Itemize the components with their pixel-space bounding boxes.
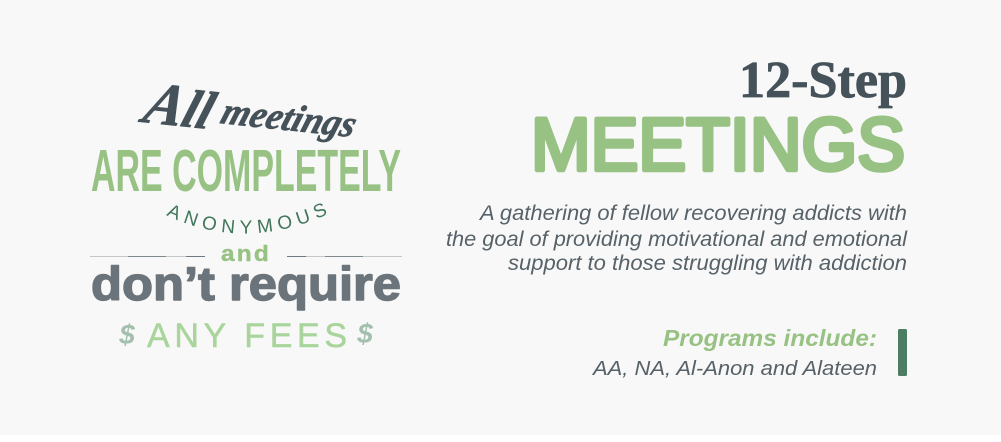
divider left <box>90 256 205 257</box>
title block <box>531 52 907 186</box>
text: ANY FEES: ANY FEES <box>147 317 347 355</box>
heading: don't require: don’t require <box>91 257 401 310</box>
callout heading: Programs include: <box>663 325 877 351</box>
title: MEETINGS: MEETINGS <box>531 103 905 186</box>
accent bar <box>898 329 907 376</box>
curved text: ANONYMOUS: ANONYMOUS <box>166 204 326 234</box>
callout: programs <box>591 325 907 380</box>
word: and: and <box>221 241 271 266</box>
title: 12-Step: 12-Step <box>739 52 907 109</box>
icon: dollar sign right: $ <box>356 318 373 349</box>
icon: dollar sign left: $ <box>118 319 135 350</box>
heading: ARE COMPLETELY: ARE COMPLETELY <box>91 138 401 204</box>
panel: quote lockup <box>90 70 402 355</box>
script heading: All meetings: ll <box>175 79 224 140</box>
description text: support to those struggling with addiction <box>508 252 907 275</box>
script heading: All meetings: meetings <box>207 90 362 146</box>
script heading: All meetings: A <box>133 70 196 139</box>
description text: A gathering of fellow recovering addicts with <box>478 202 907 225</box>
divider right <box>287 256 402 257</box>
callout list: AA, NA, Al-Anon and Alateen <box>591 357 877 380</box>
description text: the goal of providing motivational and emotional <box>446 228 908 251</box>
description text <box>446 202 908 275</box>
